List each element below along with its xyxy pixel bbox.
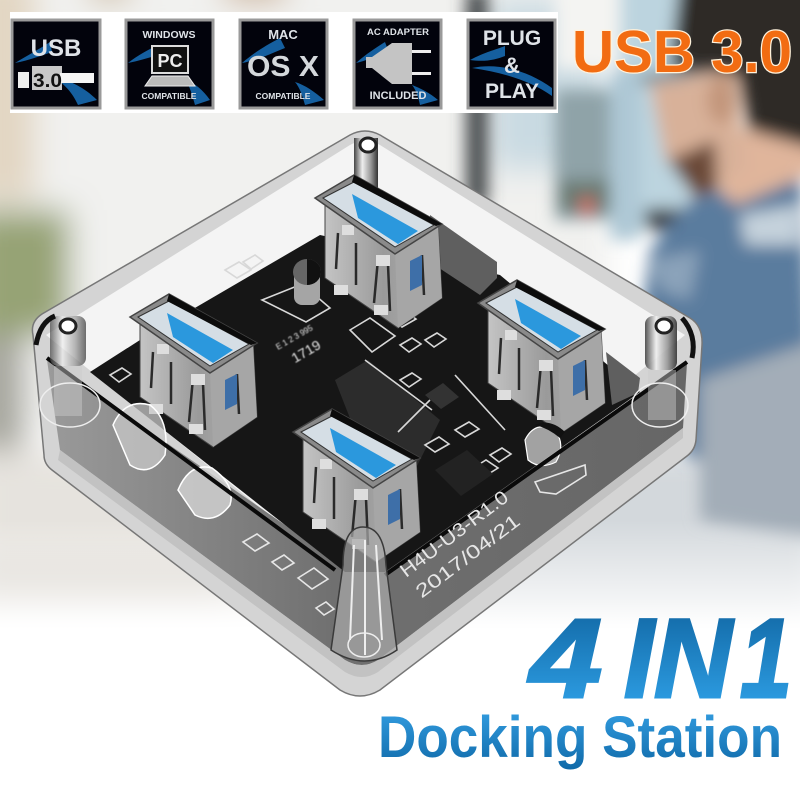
badge strip xyxy=(10,12,558,113)
badge: Plug & Play: PLAY xyxy=(485,80,539,103)
circuit board: 1719 xyxy=(288,336,324,366)
badge: Windows PC compatible: WINDOWS xyxy=(142,29,196,41)
badge: AC adapter included: AC ADAPTER xyxy=(367,27,429,38)
right post xyxy=(632,316,693,427)
badge: Plug & Play: & xyxy=(504,53,520,78)
badge: Windows PC compatible xyxy=(126,20,213,108)
circuit board: E 1 2 3 995 xyxy=(274,323,315,352)
USB port: right xyxy=(478,280,605,433)
heading: 4 IN 1 xyxy=(528,596,792,721)
left post xyxy=(36,316,100,427)
board text: 2017/04/21 xyxy=(412,511,524,603)
badge: Plug & Play: PLUG xyxy=(483,27,541,50)
heading: USB 3.0: USB 3.0 xyxy=(572,19,792,85)
hub shell xyxy=(32,131,702,696)
badge: USB 3.0: 3.0 xyxy=(33,71,62,92)
board text xyxy=(396,487,528,603)
capacitors seen through shell xyxy=(113,404,565,518)
rear post xyxy=(354,138,378,200)
badge: Plug & Play xyxy=(468,20,555,108)
screw hole: rear xyxy=(360,138,376,152)
rear USB blocks xyxy=(430,215,640,405)
circuit board xyxy=(90,235,640,572)
USB port: front xyxy=(293,409,420,562)
badge: USB 3.0 xyxy=(12,20,100,108)
USB port: left xyxy=(130,294,257,447)
heading: 4 IN 1: 4 xyxy=(528,596,602,721)
badge: Mac OS X compatible: MAC xyxy=(268,27,298,42)
badge: Mac OS X compatible: COMPATIBLE xyxy=(256,91,311,101)
capacitor xyxy=(293,259,321,305)
bottom components xyxy=(243,465,586,615)
transparent hub product xyxy=(32,131,702,696)
front black edge lines xyxy=(47,358,687,575)
badge: Mac OS X compatible xyxy=(240,20,327,108)
badge: Mac OS X compatible: OS X xyxy=(247,51,320,83)
badge: USB 3.0: USB xyxy=(31,35,81,62)
badge: AC adapter included: INCLUDED xyxy=(370,90,426,102)
board text: H4U-U3-R1.0 xyxy=(396,487,513,582)
USB port: rear xyxy=(315,175,442,328)
badge: Windows PC compatible: PC xyxy=(157,51,183,71)
heading: 4 IN 1: IN xyxy=(624,596,734,721)
badge: AC adapter included xyxy=(354,20,441,108)
front post xyxy=(331,527,397,661)
badge: Windows PC compatible: COMPATIBLE xyxy=(142,91,197,101)
